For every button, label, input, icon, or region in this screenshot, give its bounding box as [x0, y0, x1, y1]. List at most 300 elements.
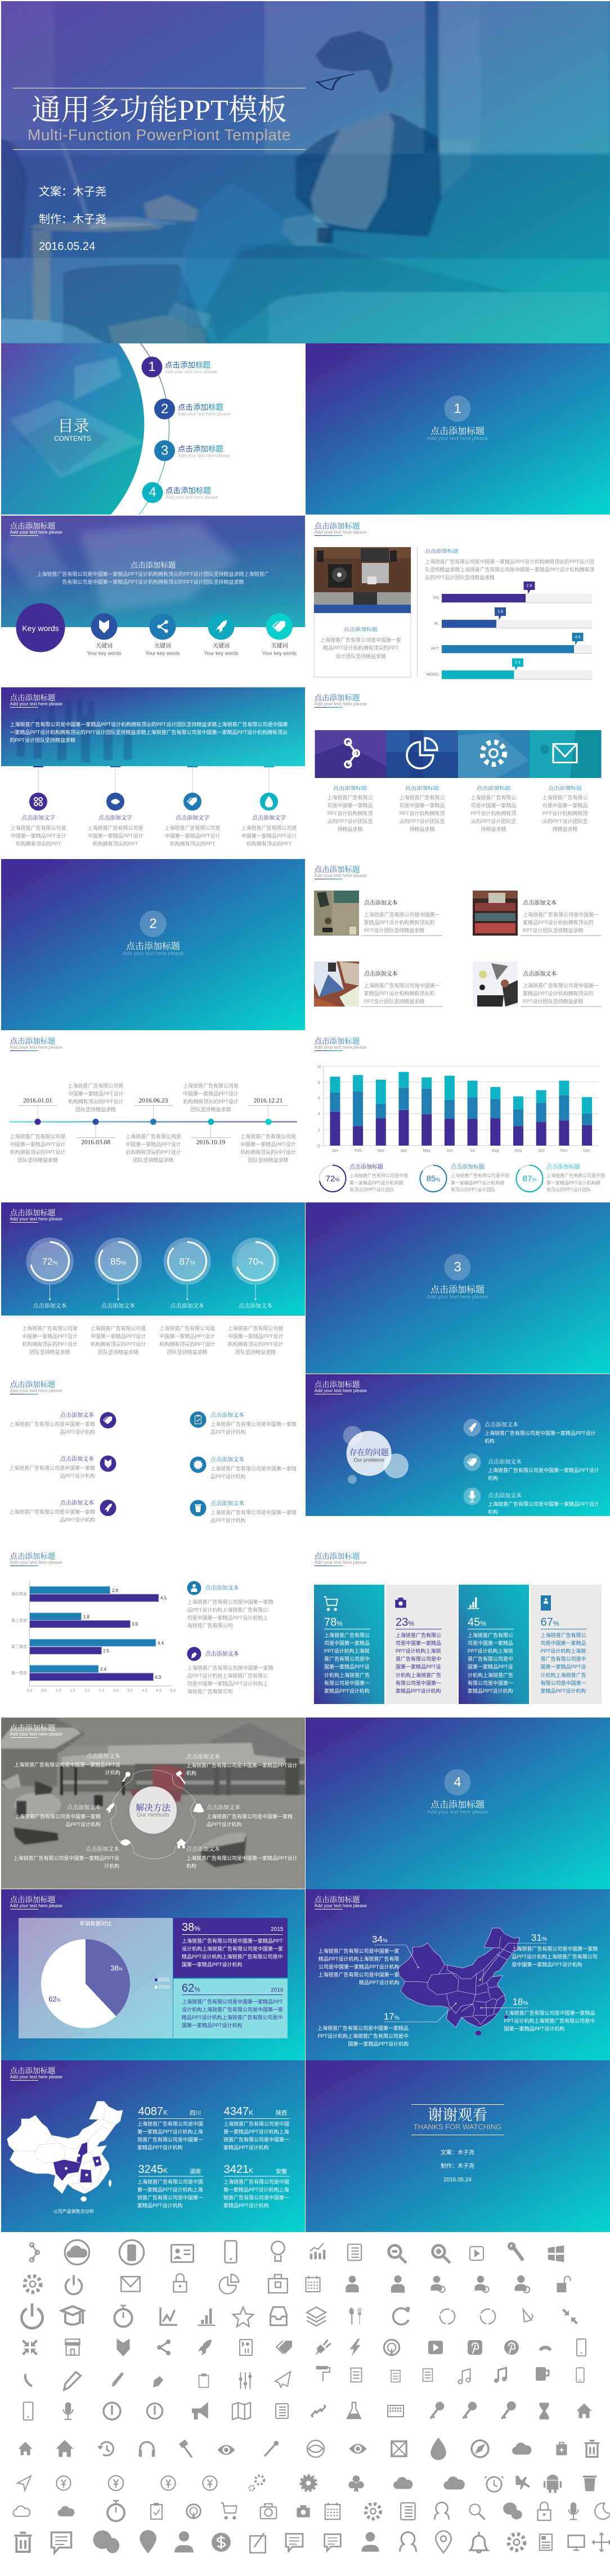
bubbles and item icons: [306, 1374, 610, 1516]
section title: 点击添加标题: [430, 1800, 485, 1810]
item 5 text: [210, 1465, 297, 1481]
horizontal bar chart: 第三季度: [11, 1618, 27, 1624]
ring 2 text: 团队坚持精益求精: [98, 1349, 138, 1355]
ring 4 text: 中国第一家精品PPT设计: [228, 1334, 283, 1339]
cover rule bottom: [13, 149, 306, 150]
item 3 title: 点击添加文本: [60, 1500, 94, 1506]
middle right text: 上海锐普广告有限公司是中国第一家精: [207, 1814, 293, 1819]
column 2 title: 点击添加文字: [98, 815, 132, 821]
legend 2016: 2016: [158, 1984, 169, 1989]
keyword 2: [145, 643, 180, 656]
heading: Add your text here please: [10, 1388, 62, 1393]
ring 1 label: 点击添加文本: [33, 1303, 66, 1309]
slide: six icon items: [1, 1374, 305, 1546]
slide: key words: [1, 516, 305, 687]
ring 1 text: 团队坚持精益求精: [29, 1349, 70, 1355]
slide: timeline: [1, 1031, 305, 1202]
card 4 text: 司是中国第一家精品: [541, 1640, 586, 1646]
donut 72 text: 第一家精品PPT设计机构拥: [349, 1180, 403, 1186]
date 5: 2016.12.21: [254, 1097, 282, 1104]
stat 4087K text: [137, 2120, 203, 2152]
donut 85 text: 上海锐普广告有限公司是中国: [451, 1173, 509, 1178]
cover credits: 制作：木子尧: [39, 213, 106, 225]
column 1 text: 上海锐普广告有限公: [327, 795, 373, 800]
item 1 text: 品PPT设计机构: [60, 1429, 95, 1435]
ring 4 label: 点击添加文本: [239, 1303, 272, 1309]
item 1 text: 上海锐普广告有限公司是中国第一: [364, 912, 440, 918]
icon row 2: [25, 2274, 571, 2294]
horizontal bar chart: 第四季度: [11, 1591, 27, 1597]
methods icons: [106, 1770, 204, 1848]
card 1 text: 普广告有限公司是中: [324, 1656, 370, 1662]
stat rules: [138, 2118, 290, 2176]
stat 3245K text: 第一家精品PPT设计机构上海: [137, 2187, 203, 2193]
number 3: 3: [161, 442, 168, 458]
region 31 text: 品PPT设计机构上海锐普广告有限公司: [512, 1954, 598, 1960]
region 34 value: 34%: [372, 1934, 388, 1944]
item 1 text: [9, 1420, 95, 1436]
column 3 text: 中国第一家精品PPT设计: [165, 833, 220, 839]
card title: 点击添加标题: [344, 626, 378, 633]
item 2 sub: Add your text here please: [178, 412, 230, 417]
stat 3245K text: 锐普广告有限公司是中国第一: [137, 2195, 203, 2201]
card 2: [386, 1585, 458, 1704]
ring 70: [232, 1237, 279, 1300]
box 2016: [173, 1979, 288, 2038]
item 2 text: [9, 1464, 95, 1480]
horizontal bar chart: 4.5: [156, 1689, 162, 1693]
item 5 title: 点击添加文本: [210, 1457, 244, 1463]
item 3 text: PPT设计团队坚持精益求精: [364, 999, 424, 1004]
donut 87 text: 第一家精品PPT设计机构拥: [546, 1180, 600, 1186]
item 4 text: 上海锐普广告有限公司是中国第一: [523, 983, 599, 989]
donut 72 title: 点击添加标题: [349, 1164, 383, 1170]
slide: four stat cards: [306, 1546, 610, 1717]
column 3 text: 司是中国第一家精品: [470, 803, 517, 808]
cover title: 通用多功能PPT模板: [32, 95, 287, 127]
axis labels: 2: [318, 1129, 320, 1133]
text 1: [10, 1133, 66, 1164]
item 3 title: 点击添加文本: [364, 971, 398, 977]
heading: [10, 2067, 66, 2081]
ring 2 label: 点击添加文本: [101, 1303, 135, 1309]
item 2 text: 上海锐普广告有限公司是中国第一家精: [187, 1665, 273, 1671]
keyword 2: Your key words: [145, 651, 180, 656]
card 3 text: 计机构上海锐普广告: [468, 1672, 513, 1678]
region 17 value: 17%: [384, 2011, 400, 2022]
bottom left text: 计机构: [104, 1863, 119, 1869]
center text: 上海锐普广告有限公司是中国第一家精品PPT设计机构拥有顶尖的PPT设计团队坚持精益求精上海锐普广: [37, 571, 270, 577]
box 2016 text: 国第一家精品PPT设计机构: [182, 2023, 243, 2028]
pie label 62: 62%: [48, 1995, 61, 2003]
keyword 2: 关键词: [154, 643, 171, 650]
item icon 1: [187, 1581, 201, 1595]
slide: cover: [1, 1, 610, 343]
region 34 text: 精品PPT设计机构: [359, 1980, 400, 1985]
column 1 text: [10, 825, 66, 847]
ring 4 value: 70%: [248, 1256, 263, 1267]
axis labels: Jun: [446, 1149, 453, 1153]
icon row 8: [17, 2475, 596, 2493]
slide: our methods snow photo: [1, 1718, 305, 1889]
card 2 text: 上海锐普广告有限公: [396, 1633, 441, 1638]
card 4 text: 上海锐普广告有限公: [541, 1633, 586, 1638]
bar values: WORD: [427, 673, 439, 677]
region 18 text: [504, 2009, 595, 2033]
horizontal bar chart: 1.0: [56, 1689, 61, 1693]
thanks subtitle: THANKS FOR WATCHING: [414, 2122, 501, 2131]
item 1 text: [187, 1598, 273, 1630]
item 4 sub: Add your text here please: [165, 495, 218, 500]
photo card and progress bars graphics: [314, 547, 592, 680]
ring 3 text: [159, 1325, 215, 1356]
banner text: 上海锐普广告有限公司是中国第一家精品PPT设计机构拥有顶尖的PPT设计团队坚持精益求精上海锐普广告有限公司是中国第: [10, 722, 288, 727]
stat 3421K text: 第一家精品PPT设计机构上海: [223, 2187, 289, 2193]
chart labels: [83, 1588, 167, 1680]
section number: [445, 395, 470, 422]
ring 1 text: [22, 1325, 78, 1356]
card 4 text: 计机构上海锐普广告: [541, 1672, 586, 1678]
donut 72 text: [349, 1173, 408, 1194]
text 2: 机构拥有顶尖的PPT设计: [68, 1099, 123, 1104]
slide: icon strip: [306, 687, 610, 858]
text 1: 团队坚持精益求精: [17, 1157, 58, 1163]
highlighted provinces: [53, 2143, 101, 2183]
number 2: 2: [161, 401, 168, 417]
text 2: [68, 1082, 124, 1113]
text 4: 上海锐普广告有限公司是: [183, 1083, 239, 1089]
icon row 10: [14, 2530, 610, 2553]
contents curved photo panel: [1, 343, 175, 515]
item 3 text: 品PPT设计机构: [60, 1517, 95, 1523]
ring 85: [95, 1237, 142, 1300]
text 2: 团队坚持精益求精: [75, 1107, 116, 1112]
box 2015 text: 设计机构上海锐普广告有限公司是中国第一家: [182, 1946, 283, 1952]
column 1 text: 持精益求精: [337, 826, 363, 832]
heading: Add your text here please: [314, 701, 367, 706]
card 1 text: 有限公司是中国第一: [324, 1680, 370, 1686]
stat 3245K text: 家精品PPT设计机构: [137, 2203, 183, 2208]
section subtitle: Add your text here please: [123, 950, 183, 956]
top left text: 计机构: [105, 1770, 120, 1776]
stat 3245K text: [137, 2178, 203, 2210]
column 1 title: 点击添加文字: [21, 815, 55, 821]
box 2016 year: 2016: [271, 1987, 284, 1993]
heading: Add your text here please: [314, 873, 367, 878]
donut 85 title: 点击添加标题: [451, 1164, 485, 1170]
section number: [445, 1254, 470, 1280]
keyword 3: [204, 643, 239, 656]
card 2 text: PPT设计机构上海锐: [396, 1648, 441, 1654]
bottom right text: [186, 1854, 298, 1870]
item 2 text: 品PPT设计机构上海锐普广告有限公: [187, 1673, 268, 1679]
thanks credits: 文案：木子尧: [441, 2149, 474, 2156]
slide: photo card and progress bars: [306, 516, 610, 687]
middle left text: 品PPT设计机构: [65, 1822, 101, 1827]
card 3 text: 上海锐普广告有限公: [468, 1633, 513, 1638]
item 2 text: 上海锐普广告有限公司是中国第一家精: [9, 1465, 95, 1471]
ring 87: [164, 1237, 211, 1300]
stat 4347K text: 第一家精品PPT设计机构上海: [223, 2129, 289, 2135]
region 34 text: 上海锐普广告有限公司是中国第一家: [318, 1972, 400, 1978]
photo underlines: [361, 935, 602, 1007]
bottom left text: 上海锐普广告有限公司是中国第一家精品PPT设: [13, 1855, 119, 1861]
photo desktop flatlay: [473, 961, 518, 1007]
bubble title: 存在的问题: [349, 1449, 389, 1457]
card 2 text: 国第一家精品PPT设: [396, 1664, 441, 1670]
card 1 text: 家精品PPT设计机构: [324, 1688, 370, 1694]
heading: [10, 1895, 66, 1910]
chart labels: 4.5: [160, 1595, 167, 1601]
item 2 text: 海锐普广告有限公司: [187, 1689, 233, 1694]
box 2016 rule: [182, 1994, 282, 1995]
number 4: 4: [149, 485, 156, 500]
donut 85 label: 85%: [427, 1174, 440, 1183]
axis labels: Jan: [332, 1149, 338, 1153]
stat 4347K text: [223, 2120, 289, 2152]
region 17 text: [317, 2024, 409, 2048]
top left text: [14, 1761, 120, 1777]
item 1 title: 点击添加文本: [485, 1422, 518, 1428]
item 4 text: 上海锐普广告有限公司是中国第一家精: [210, 1421, 297, 1427]
heading: Add your text here please: [10, 1732, 62, 1736]
column 4 text: [241, 825, 297, 847]
text 5: 机构拥有顶尖的PPT设计: [240, 1150, 296, 1155]
item 3 text: [488, 1500, 599, 1517]
heading: 点击添加标题: [10, 694, 55, 702]
heading: 点击添加标题: [10, 1895, 55, 1904]
slide: section 3: [306, 1202, 610, 1374]
item 1 sub: Add your text here please: [165, 369, 217, 374]
keyword 4: Your key words: [262, 651, 297, 656]
right text: [425, 558, 594, 580]
heading: 点击添加标题: [314, 694, 360, 702]
white china map: [1, 2060, 305, 2232]
heading: [10, 1380, 66, 1395]
ring 4 text: 团队坚持精益求精: [235, 1349, 276, 1355]
item 3 text: 家精品PPT设计机构拥有顶尖的: [364, 991, 434, 996]
item 1 text: 海锐普广告有限公司: [187, 1623, 233, 1629]
stat 4087K text: 第一家精品PPT设计机构上海: [137, 2129, 203, 2135]
item 1 text: 上海锐普广告有限公司是中国第一家精: [9, 1421, 95, 1427]
donut 87: [517, 1165, 542, 1192]
heading: 点击添加标题: [10, 522, 55, 530]
bottom left title: 点击添加文本: [86, 1846, 119, 1853]
thanks credits: 制作：木子尧: [441, 2163, 474, 2170]
section number: 3: [454, 1260, 461, 1274]
slide: contents: [1, 343, 305, 515]
cover photo: man with laptop on sofa: [1, 1, 610, 343]
bar values: 4.4: [575, 635, 580, 639]
thanks credits: [441, 2146, 474, 2186]
horizontal bar chart: [1, 1546, 305, 1717]
heading: [10, 1209, 66, 1223]
ring 1 text: 上海锐普广告有限公司是: [22, 1326, 78, 1331]
item 4 text: 家精品PPT设计机构拥有顶尖的: [523, 991, 594, 996]
text 3: 团队坚持精益求精: [133, 1157, 174, 1163]
column 1 text: PPT设计机构拥有顶: [328, 811, 373, 816]
card 2 text: 计机构上海锐普广告: [396, 1672, 441, 1678]
heading: Add your text here please: [10, 2074, 62, 2079]
heading: [10, 1037, 66, 1052]
card 1 text: [324, 1631, 370, 1695]
bottom right text: 机构: [186, 1863, 196, 1869]
heading: Add your text here please: [10, 1045, 62, 1049]
item 2 title: 点击添加文本: [60, 1456, 94, 1463]
ring 1 text: 机构拥有顶尖的PPT设计: [22, 1341, 78, 1347]
heading: Add your text here please: [10, 1216, 62, 1222]
item 2 text: PPT设计团队坚持精益求精: [523, 928, 584, 933]
card 4 text: 国第一家精品PPT设: [541, 1664, 586, 1670]
card 3 text: [468, 1631, 513, 1695]
item 5 text: 品PPT设计机构: [210, 1474, 246, 1479]
contents item 2: 点击添加标题: [178, 403, 223, 412]
top right text: 上海锐普广告有限公司是中国第一家精品PPT设计: [186, 1763, 298, 1768]
map dots: [418, 1967, 482, 2009]
box 2015 text: 上海锐普广告有限公司是中国第一家精品PPT: [182, 1938, 283, 1944]
item 3 text: 上海锐普广告有限公司是中国第一: [364, 983, 440, 989]
column 3 text: [164, 825, 221, 847]
item 4 text: [523, 982, 599, 1005]
heading: 点击添加标题: [10, 1037, 55, 1045]
column 2 text: [399, 795, 445, 832]
snow scene photo: [1, 1718, 305, 1889]
text 4: 中国第一家精品PPT设计: [183, 1091, 239, 1097]
text 3: [125, 1133, 181, 1164]
card text: [320, 637, 401, 659]
horizontal bar chart: 第一季度: [11, 1670, 27, 1676]
heading: Add your text here please: [10, 529, 62, 535]
right title: 点击添加标题: [425, 548, 459, 554]
heading: Add your text here please: [10, 701, 62, 706]
slide: section 4: [306, 1718, 610, 1889]
contents item 3: 点击添加标题: [178, 445, 223, 453]
card 4 text: PPT设计机构上海锐: [541, 1648, 586, 1654]
box 2016 text: 上海锐普广告有限公司是中国第一家精品PPT: [182, 1999, 283, 2005]
heading: 点击添加标题: [10, 1209, 55, 1217]
section title: 点击添加标题: [430, 1285, 485, 1295]
card 3 text: PPT设计机构上海锐: [468, 1648, 513, 1654]
chart labels: 4.4: [158, 1640, 164, 1646]
top right text: [186, 1761, 298, 1777]
slide: crowd banner with four columns: [1, 687, 305, 858]
item 3 sub: Add your text here please: [178, 453, 230, 458]
item 4 text: [210, 1420, 297, 1436]
item 1 text: 品PPT设计机构上海锐普广告有限公: [187, 1607, 268, 1613]
item 5 text: 上海锐普广告有限公司是中国第一家精: [210, 1466, 297, 1472]
bottom right text: 上海锐普广告有限公司是中国第一家精品PPT设计: [186, 1855, 298, 1861]
column 3 title: 点击添加文字: [176, 815, 209, 821]
ring 3 label: 点击添加文本: [171, 1303, 204, 1309]
item 1 text: 上海锐普广告有限公司是中国第一家精品PPT设计: [485, 1430, 596, 1436]
column 4 text: PPT设计机构拥有顶: [542, 811, 587, 816]
card 1: [314, 1585, 384, 1704]
card 2 text: [396, 1631, 441, 1695]
item 2 title: 点击添加文本: [205, 1651, 239, 1657]
axis labels: Mar: [378, 1149, 384, 1153]
box 2016 text: [182, 1998, 283, 2029]
horizontal bar chart: 2.0: [84, 1689, 90, 1693]
methods center circle: [129, 1787, 177, 1834]
region 34 text: [318, 1947, 400, 1987]
column 1 text: 司是中国第一家精品: [327, 803, 373, 808]
region 18 text: 上海锐普广告有限公司是中国第一家精品: [504, 2010, 595, 2016]
heading: [10, 1724, 66, 1738]
bottom left text: [13, 1854, 119, 1870]
bar values: [427, 584, 581, 677]
item 1 title: 点击添加文本: [205, 1585, 239, 1591]
horizontal bar chart: 4.0: [142, 1689, 147, 1693]
heading: 点击添加标题: [10, 2067, 55, 2075]
item 4 title: 点击添加文本: [210, 1412, 244, 1419]
item 3 title: 点击添加文本: [488, 1493, 522, 1499]
section number: 4: [454, 1774, 461, 1790]
keyword 3: Your key words: [204, 651, 239, 656]
stat 3421K text: 家精品PPT设计机构: [223, 2203, 269, 2208]
stat 3245K: 3245K: [138, 2163, 168, 2176]
donut 85: [420, 1165, 447, 1192]
contents heading: 目录: [57, 418, 89, 435]
pie panel background: [19, 1918, 173, 2038]
ring 4 text: [227, 1325, 284, 1356]
text 5: 中国第一家精品PPT设计: [240, 1142, 296, 1147]
progress rings: [1, 1202, 305, 1374]
card 3 text: 国第一家精品PPT设: [468, 1664, 513, 1670]
column 1 text: 机构拥有顶尖的PPT: [16, 841, 61, 847]
top right text: 机构: [186, 1770, 196, 1776]
center text: [37, 571, 270, 585]
heading: 点击添加标题: [10, 1724, 55, 1732]
ring 3 text: 中国第一家精品PPT设计: [159, 1334, 215, 1339]
item 2 text: [523, 912, 599, 933]
ring 2 text: [90, 1325, 146, 1356]
item 3 text: [9, 1508, 95, 1524]
column 4 text: 中国第一家精品PPT设计: [241, 833, 297, 839]
contents item 4: 点击添加标题: [165, 486, 211, 495]
column 2 text: 持精益求精: [409, 826, 435, 832]
axis labels: Jul: [470, 1149, 476, 1153]
heading: 点击添加标题: [314, 1037, 360, 1045]
text 3: 上海锐普广告有限公司是: [125, 1134, 181, 1139]
text 3: 中国第一家精品PPT设计: [125, 1142, 181, 1147]
item 2 text: 品PPT设计机构: [60, 1473, 95, 1479]
ring 3 text: 上海锐普广告有限公司是: [159, 1326, 215, 1331]
text 1: 上海锐普广告有限公司是: [10, 1134, 66, 1139]
section subtitle: Add your text here please: [427, 1809, 488, 1815]
middle left title: 点击添加文本: [67, 1805, 101, 1811]
photo bookshelf: [473, 891, 518, 936]
column 3 title: 点击添加标题: [477, 785, 510, 791]
cover subtitle: Multi-Function PowerPiont Template: [28, 126, 291, 144]
bar values: AL: [434, 621, 439, 626]
card 1 value: 78%: [324, 1616, 343, 1629]
heading: [314, 694, 367, 708]
top left text: 上海锐普广告有限公司是中国第一家精品PPT设: [14, 1762, 120, 1768]
region 31 text: [512, 1945, 598, 1969]
slide: four photos with text: [306, 859, 610, 1030]
bubble subtitle: Our problems: [353, 1457, 384, 1463]
stat 3245K text: 上海锐普广告有限公司是中国: [137, 2179, 203, 2185]
stat 4087K text: 家精品PPT设计机构: [137, 2145, 183, 2150]
column 3 text: PPT设计机构拥有顶: [471, 811, 516, 816]
region 31 text: 是中国第一家精品PPT设计机构: [512, 1962, 582, 1967]
chart labels: 2.4: [100, 1667, 107, 1672]
axis labels: [317, 1065, 591, 1153]
column 2 text: 上海锐普广告有限公: [399, 795, 445, 800]
ring 3 value: 87%: [180, 1256, 195, 1267]
card 3 text: 司是中国第一家精品: [468, 1640, 513, 1646]
box 2016 value: 62%: [182, 1982, 200, 1994]
